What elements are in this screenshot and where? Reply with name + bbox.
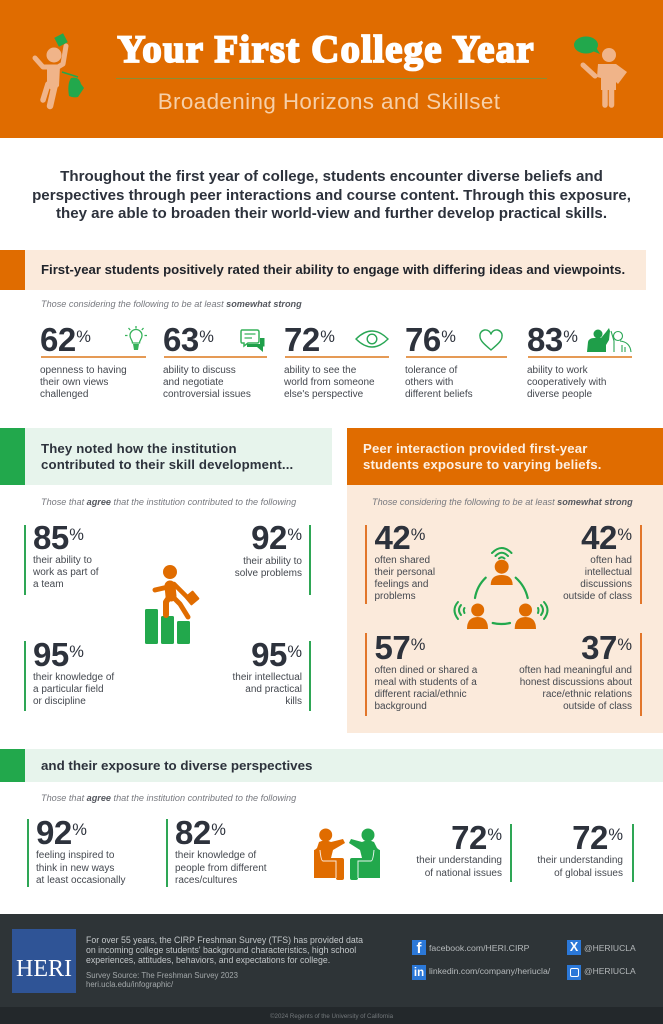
- stat 95% intellectual: and practical: [245, 684, 302, 695]
- stat 72% global: of global issues: [554, 868, 623, 878]
- stat 57%: meal with students of a: [374, 677, 477, 688]
- panel: institution skill development: [0, 428, 332, 711]
- icon: three connected people: [453, 547, 549, 629]
- subheading: Those considering the following to be at least somewhat strong: [41, 298, 302, 308]
- icon: instagram: [567, 964, 581, 980]
- stat 72% national: [416, 819, 512, 882]
- source text: Survey Source: The Freshman Survey 2023: [86, 970, 238, 980]
- icon: X: X: [570, 940, 578, 954]
- icon: heart: [479, 329, 503, 351]
- stat 83%: diverse people: [527, 388, 592, 400]
- stat 63%: [163, 321, 267, 400]
- stat 42% intellectual: 42%: [581, 519, 632, 556]
- banner: [25, 250, 646, 290]
- banner: [25, 749, 663, 782]
- footer: [0, 914, 663, 1024]
- icon: linkedin: in: [414, 966, 424, 978]
- stat 82%: people from different: [175, 862, 267, 874]
- stat 57%: different racial/ethnic: [374, 689, 467, 700]
- stat 72% global: their understanding: [537, 855, 623, 866]
- stat 83%: 83%: [527, 321, 578, 358]
- stat 92%: feeling inspired to: [36, 850, 114, 861]
- stat 62%: their own views: [40, 376, 108, 388]
- stat 42% shared: problems: [374, 591, 416, 602]
- stat 76%: others with: [405, 376, 453, 388]
- stat 82%: 82%: [175, 814, 226, 851]
- stat 72% national: 72%: [451, 819, 502, 856]
- stat 92%: think in new ways: [36, 862, 114, 874]
- stat 42% intellectual: outside of class: [563, 591, 632, 602]
- icon: eye: [355, 330, 389, 348]
- stat 92%: [27, 814, 126, 887]
- stat 72%: world from someone: [284, 376, 375, 388]
- stat 85%: work as part of: [33, 567, 99, 578]
- stat 57%: [365, 629, 478, 716]
- copyright bar: [0, 1007, 663, 1024]
- stat 42% intellectual: intellectual: [585, 567, 632, 578]
- stat 42% shared: [365, 519, 435, 604]
- stat 42% intellectual: discussions: [580, 579, 632, 590]
- title: Your First College Year: [117, 28, 535, 71]
- stat 63%: ability to discuss: [163, 364, 236, 376]
- stat 62%: openness to having: [40, 364, 127, 376]
- panel: ideas and viewpoints: [0, 250, 646, 400]
- title rule: [116, 78, 547, 79]
- stat 37%: honest discussions about: [520, 677, 632, 688]
- stat 72% global: [537, 819, 634, 882]
- stat 57%: 57%: [374, 629, 425, 666]
- stat 37%: often had meaningful and: [519, 665, 632, 676]
- stat 72% global: 72%: [572, 819, 623, 856]
- subheading: Those considering the following to be at least somewhat strong: [372, 497, 633, 507]
- about text: on incoming college students' background characteristics, high school: [86, 945, 356, 955]
- icon: X: [567, 940, 581, 955]
- stat 72%: [284, 321, 389, 400]
- stat 85%: [24, 519, 99, 595]
- intro paragraph: they are able to broaden their world-view and further develop practical skills.: [56, 205, 607, 222]
- panel heading: Peer interaction provided first-year: [363, 441, 588, 456]
- panel heading bar: [25, 428, 332, 484]
- panel heading: They noted how the institution: [41, 441, 237, 456]
- stat 85%: their ability to: [33, 555, 92, 566]
- stat 72% national: of national issues: [425, 868, 502, 878]
- stat 82%: their knowledge of: [175, 850, 256, 861]
- instagram handle: @HERIUCLA: [584, 966, 636, 976]
- stat 92%: 92%: [36, 814, 87, 851]
- stat 42% intellectual: often had: [590, 555, 632, 566]
- stat 92%: their ability to: [243, 556, 302, 567]
- stat 72% national: their understanding: [416, 855, 502, 866]
- icon: chat bubbles: [240, 329, 264, 352]
- stat 37%: outside of class: [563, 701, 632, 712]
- stat 76%: 76%: [405, 321, 456, 358]
- intro paragraph: Throughout the first year of college, students encounter diverse beliefs and: [60, 168, 603, 185]
- subheading: Those that agree that the institution contributed to the following: [41, 497, 296, 507]
- stat 76%: different beliefs: [405, 388, 473, 400]
- panel heading: contributed to their skill development...: [41, 457, 293, 472]
- subheading: Those that agree that the institution contributed to the following: [41, 793, 296, 803]
- intro paragraph: perspectives through peer interactions and course content. Through this exposure,: [32, 186, 631, 204]
- stat 83%: cooperatively with: [527, 376, 606, 388]
- banner accent: [0, 250, 25, 290]
- stat 76%: [405, 321, 507, 400]
- about text: [86, 935, 363, 965]
- icon: person with speech bubble: [574, 36, 627, 108]
- stat 92%: 92%: [251, 519, 302, 556]
- stat 63%: controversial issues: [163, 388, 251, 400]
- icon: person climbing steps: [145, 565, 200, 644]
- panel: peer interaction: [347, 428, 663, 733]
- facebook handle: facebook.com/HERI.CIRP: [429, 942, 529, 952]
- instagram glyph: [570, 968, 579, 976]
- stat 72%: 72%: [284, 321, 335, 358]
- about text: experiences, attitudes, behaviors, and expectations for college.: [86, 955, 330, 965]
- X handle: @HERIUCLA: [584, 942, 636, 952]
- stat 95% knowledge: [24, 636, 114, 711]
- panel heading: [41, 441, 293, 472]
- linkedin handle: linkedin.com/company/heriucla/: [429, 966, 550, 976]
- icon: two people talking: [314, 828, 380, 880]
- stat 37%: race/ethnic relations: [542, 689, 632, 700]
- stat 57%: often dined or shared a: [374, 665, 477, 676]
- stat 95% intellectual: kills: [285, 696, 302, 707]
- HERI logo: [12, 929, 76, 993]
- stat 95% knowledge: or discipline: [33, 696, 86, 706]
- banner heading: First-year students positively rated their ability to engage with differing ideas and viewpoints.: [41, 262, 625, 277]
- stat 95% knowledge: 95%: [33, 636, 84, 673]
- icon: light bulb: [125, 326, 147, 350]
- panel: diverse perspectives: [0, 749, 663, 887]
- subtitle: Broadening Horizons and Skillset: [158, 89, 500, 114]
- stat 42% shared: their personal: [374, 567, 435, 578]
- stat 95% intellectual: their intellectual: [233, 672, 302, 683]
- stat 62%: challenged: [40, 388, 88, 400]
- source text: heri.ucla.edu/infographic/: [86, 980, 173, 989]
- banner heading: and their exposure to diverse perspectives: [41, 758, 312, 772]
- stat 95% knowledge: a particular field: [33, 684, 104, 694]
- stat 92%: [235, 519, 311, 595]
- stat 37%: [519, 629, 642, 716]
- stat 62%: [40, 321, 146, 400]
- header band: [0, 0, 663, 138]
- stat 42% shared: feelings and: [374, 579, 428, 590]
- panel heading: [363, 441, 602, 472]
- stat 85%: a team: [33, 579, 64, 590]
- logo text: HERI: [16, 956, 72, 982]
- intro paragraph: [32, 168, 631, 222]
- panel heading: students exposure to varying beliefs.: [363, 457, 602, 472]
- stat 63%: and negotiate: [163, 376, 224, 388]
- stat 92%: at least occasionally: [36, 875, 126, 886]
- stat 85%: 85%: [33, 519, 84, 556]
- stat 72%: ability to see the: [284, 364, 356, 376]
- icon: facebook: [412, 940, 426, 955]
- copyright: ©2024 Regents of the University of California: [270, 1012, 393, 1020]
- stat 42% shared: often shared: [374, 555, 430, 566]
- icon: high five: [587, 328, 632, 352]
- about text: For over 55 years, the CIRP Freshman Survey (TFS) has provided data: [86, 935, 363, 945]
- stat 82%: races/cultures: [175, 875, 237, 886]
- panel heading bar: [347, 428, 663, 484]
- stat 72%: else's perspective: [284, 388, 363, 400]
- stat 42% shared: 42%: [374, 519, 425, 556]
- icon: student with bag: [32, 33, 84, 110]
- banner accent: [0, 749, 25, 782]
- icon: linkedin: [412, 964, 426, 980]
- stat 92%: solve problems: [235, 568, 302, 579]
- source text: [86, 970, 238, 989]
- stat 57%: background: [374, 701, 427, 712]
- stat 82%: [166, 814, 267, 887]
- stat 95% intellectual: 95%: [251, 636, 302, 673]
- stat 62%: 62%: [40, 321, 91, 358]
- stat 37%: 37%: [581, 629, 632, 666]
- stat 63%: 63%: [163, 321, 214, 358]
- stat 83%: ability to work: [527, 364, 588, 376]
- stat 76%: tolerance of: [405, 364, 457, 376]
- panel accent: [0, 428, 25, 484]
- stat 42% intellectual: [563, 519, 642, 604]
- stat 95% intellectual: [232, 636, 311, 711]
- stat 95% knowledge: their knowledge of: [33, 672, 114, 682]
- stat 83%: [527, 321, 632, 400]
